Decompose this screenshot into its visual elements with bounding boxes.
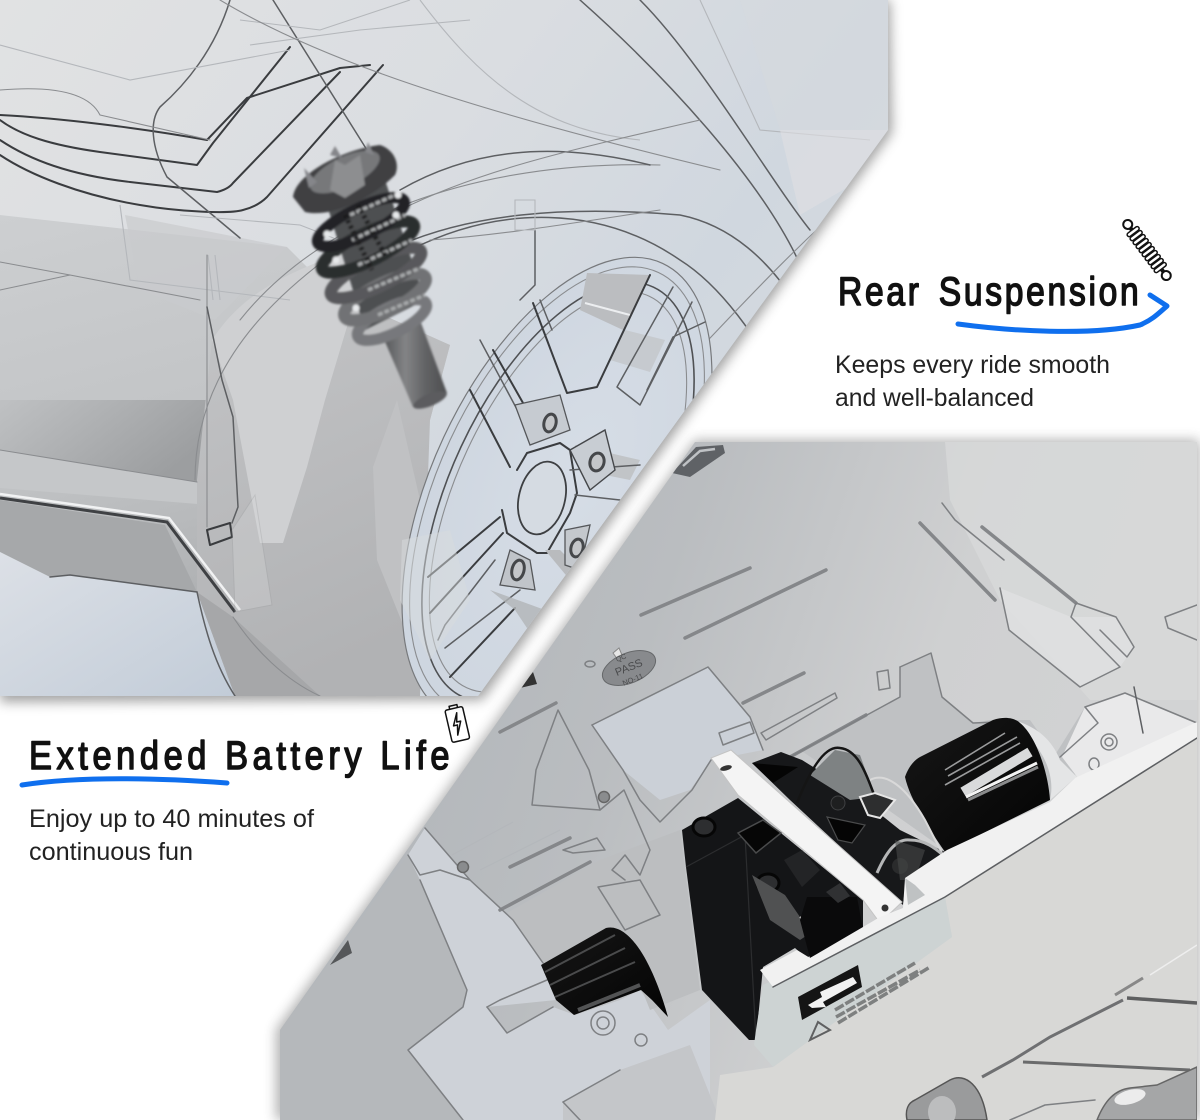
faint translucent patches bbox=[400, 530, 470, 660]
floor outline lines bbox=[408, 503, 1197, 1120]
wheel bbox=[400, 256, 712, 696]
screws bbox=[1101, 734, 1117, 750]
lower left grey floor bbox=[280, 828, 470, 1120]
upper mid grey wedge bbox=[125, 215, 283, 246]
suspension coil spring bbox=[293, 142, 449, 412]
text block: battery description: Enjoy up to 40 minutes of bbox=[29, 805, 314, 833]
recess grey under battery bbox=[644, 921, 700, 1010]
upper grey spoke shading bbox=[580, 273, 650, 330]
light bluish strip bbox=[408, 828, 710, 1120]
front battery block bbox=[682, 798, 863, 1040]
heading: Extended Battery Life: Extended Battery Life bbox=[29, 733, 450, 778]
upper quarter gradient bbox=[0, 400, 210, 482]
light sill band bbox=[92, 477, 197, 504]
plastic bag shape bbox=[592, 667, 763, 800]
underline: blue hand-drawn stroke bbox=[22, 779, 227, 785]
left motor drum bbox=[541, 927, 668, 1017]
fender and arch lines bbox=[195, 0, 888, 480]
tire bbox=[197, 300, 450, 696]
front light floor bbox=[715, 969, 910, 1120]
corner tabs on panel edge bbox=[330, 445, 725, 965]
right wall light area bbox=[945, 442, 996, 526]
car body side panel bbox=[0, 215, 306, 689]
headlight lines bbox=[0, 0, 470, 300]
panel: battery compartment illustration bbox=[270, 440, 1200, 1120]
compartment box face and label bbox=[754, 722, 1197, 1067]
underline arrow: blue hand-drawn stroke bbox=[958, 295, 1167, 331]
recess behind right drum bbox=[800, 653, 1095, 850]
lug nuts bbox=[542, 413, 558, 433]
warning label bbox=[798, 965, 862, 1020]
left edge outlines bbox=[408, 855, 470, 880]
panel: rear suspension illustration bbox=[0, 0, 892, 769]
foreground shapes bbox=[906, 945, 1197, 1120]
dark sill panel bbox=[0, 500, 197, 592]
text block: rear suspension description: Keeps every ride smooth bbox=[835, 351, 1110, 379]
spokes lower bbox=[428, 517, 500, 577]
lug nut pads bbox=[570, 430, 615, 490]
icon: shock absorber bbox=[1119, 217, 1175, 283]
lower bluish ground bbox=[0, 552, 235, 696]
pass sticker bbox=[602, 650, 656, 686]
right motor drum bbox=[905, 717, 1078, 852]
tail light and sill lines bbox=[0, 255, 320, 696]
icon: battery with bolt bbox=[444, 703, 470, 743]
text block: rear suspension description: and well-balanced bbox=[835, 384, 1034, 412]
heading: Rear Suspension: Rear Suspension bbox=[838, 269, 1139, 314]
pass sticker: NO-11 bbox=[621, 671, 644, 688]
pass sticker: QC bbox=[615, 653, 628, 664]
white retaining bar bbox=[711, 750, 902, 923]
fender translucent flap bbox=[212, 252, 355, 543]
text block: battery description: continuous fun bbox=[29, 838, 193, 866]
hub hex outline bbox=[502, 443, 577, 553]
rear battery block bbox=[752, 748, 945, 905]
pass sticker: PASS bbox=[614, 657, 644, 679]
